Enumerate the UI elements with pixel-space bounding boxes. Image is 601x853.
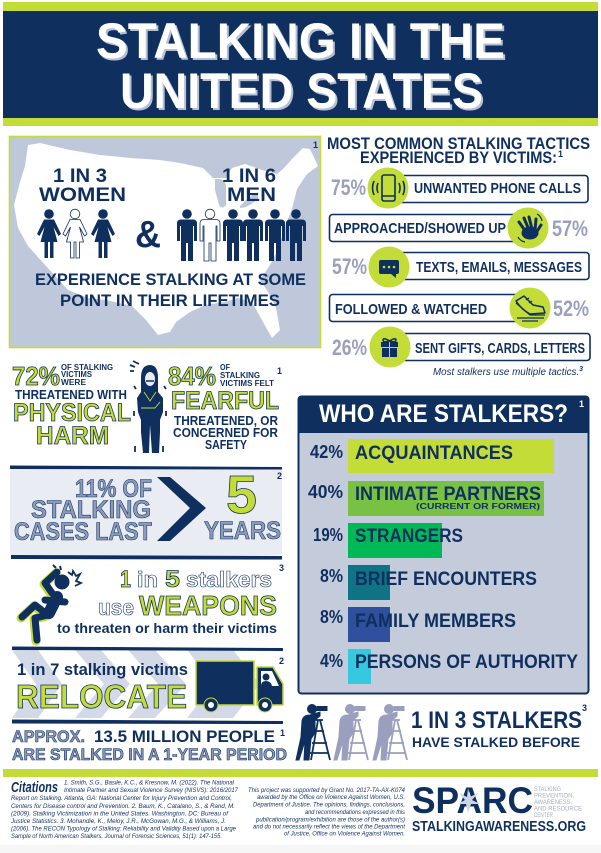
tactic: followed: 52%: [553, 296, 589, 321]
men statistic: MEN: [227, 185, 276, 206]
divider: [11, 555, 282, 560]
statement: [35, 270, 306, 310]
panel: who are stalkers: [298, 396, 589, 694]
weapons text: in: [137, 567, 158, 592]
weapons text: 3: [279, 563, 284, 573]
tactics note: 3: [579, 366, 583, 373]
five years value: YEARS: [204, 517, 281, 545]
percent labels: 42%: [310, 442, 343, 462]
72 percent statistic: PHYSICAL: [13, 399, 131, 427]
repeat stalkers text: 3: [582, 703, 587, 713]
title: STALKING IN THE: [96, 13, 505, 69]
footer bar: [3, 769, 598, 777]
panel: annual count: [12, 727, 287, 764]
relocate text: 1 in 7 stalking victims: [17, 660, 188, 679]
title: [96, 13, 505, 119]
panel: stalking tactics: [327, 135, 590, 378]
tactic: gifts: 26%: [332, 335, 367, 360]
funding statement: [248, 787, 406, 838]
category labels: (CURRENT OR FORMER): [416, 502, 540, 511]
bar chart: [308, 439, 578, 684]
relocate text: 2: [279, 656, 284, 666]
category labels: INTIMATE PARTNERS: [355, 484, 541, 505]
tactic: approached: 57%: [552, 216, 588, 241]
title: UNITED STATES: [120, 63, 483, 119]
84 percent statistic: 1: [277, 366, 282, 376]
panel: five years: [10, 465, 282, 555]
weapons text: WEAPONS: [139, 590, 277, 621]
panel: annual count: 13.5 MILLION PEOPLE: [94, 727, 275, 746]
84 percent statistic: CONCERNED FOR: [173, 425, 279, 440]
funding statement: of Justice, Office on Violence Against Women.: [284, 830, 405, 838]
citations: (2006). The RECON Typology of Stalking: Reliability and Validity Based upon a Large: [11, 826, 236, 832]
panel: annual count: ARE STALKED IN A 1-YEAR PERIOD: [12, 746, 287, 764]
panel: repeat stalkers: [296, 703, 587, 760]
tactic: messages: 57%: [332, 254, 367, 279]
tactic: followed: [330, 288, 589, 328]
weapons text: 1: [120, 566, 131, 593]
logo descriptor: [534, 786, 583, 819]
title banner: UNITED STATES: [122, 65, 485, 121]
logo descriptor: AWARENESS,: [534, 799, 572, 806]
weapons text: stalkers: [186, 567, 272, 592]
category labels: BRIEF ENCOUNTERS: [355, 569, 537, 590]
weapons text: [57, 563, 284, 636]
citations: Centers for Disease control and Prevention. 2. Baum, K., Catalano, S., & Rand, M.: [11, 803, 235, 810]
72 percent statistic: HARM: [36, 422, 109, 450]
relocate text: [16, 656, 284, 715]
84 percent statistic: OF: [220, 363, 230, 372]
panel: annual count: 1: [280, 728, 285, 738]
men statistic: 1 IN 6: [222, 166, 276, 187]
logo descriptor: PREVENTION,: [534, 792, 574, 800]
duration text: STALKING: [31, 496, 151, 524]
tactic: gifts: [332, 326, 590, 368]
84 percent statistic: THREATENED, OR: [174, 413, 279, 428]
percent labels: 8%: [320, 566, 343, 586]
72 percent statistic: THREATENED WITH: [15, 387, 127, 402]
repeat stalkers text: HAVE STALKED BEFORE: [412, 734, 580, 750]
84 percent statistic: FEARFUL: [171, 387, 279, 415]
statement: POINT IN THEIR LIFETIMES: [60, 291, 280, 310]
duration text: CASES LAST: [14, 518, 152, 546]
title banner: [3, 2, 598, 126]
citations: Citations: [11, 779, 58, 796]
weapons text: to threaten or harm their victims: [57, 620, 277, 636]
panel: who are stalkers: 1: [579, 399, 584, 409]
icon: three watchers on ladders: [296, 704, 407, 760]
five years value: [204, 465, 282, 545]
tactic: phone calls: [331, 168, 588, 208]
category labels: [355, 443, 578, 673]
tactic: approached: [330, 208, 588, 248]
men statistic: [222, 166, 276, 206]
percent labels: 40%: [308, 482, 343, 502]
tactic: approached: APPROACHED/SHOWED UP: [334, 220, 506, 237]
category labels: STRANGERS: [355, 526, 463, 547]
tactic: followed: FOLLOWED & WATCHED: [335, 301, 487, 318]
icon: frightened person: [130, 361, 166, 453]
citations: [10, 779, 238, 840]
citations: Justice Statistics. 3. Mohandie, K., Meloy, J.R., McGowan, M.G., & Williams, J.: [10, 818, 226, 825]
tactics heading: EXPERIENCED BY VICTIMS:: [360, 149, 557, 167]
citations: Report on Stalking. Atlanta, GA: National Center for Injury Prevention and Control,: [11, 795, 232, 802]
chevron background: [12, 650, 260, 718]
women statistic: 1 IN 3: [53, 166, 107, 187]
tactic: messages: [332, 246, 589, 288]
icon: logo star: [458, 788, 480, 813]
panel heading: WHO ARE STALKERS?: [319, 400, 568, 428]
funding statement: publication/program/exhibition are those of the author(s): [255, 816, 405, 824]
72 percent statistic: WERE: [61, 378, 87, 387]
logo descriptor: STALKING: [534, 786, 561, 793]
84 percent statistic: 84%: [168, 361, 216, 391]
72 percent statistic: 72%: [12, 361, 60, 391]
map of the United States: [14, 143, 318, 338]
icon: moving truck: [196, 661, 283, 712]
category labels: FAMILY MEMBERS: [355, 611, 516, 632]
logo descriptor: AND RESOURCE: [534, 806, 583, 812]
statement: EXPERIENCE STALKING AT SOME: [35, 270, 306, 289]
panel: weapons: [21, 563, 284, 641]
divider: [12, 720, 283, 724]
citations: Sample of North American Stalkers. Journal of Forensic Sciences, 51(1): 147-155.: [11, 833, 222, 840]
84 percent statistic: STALKING: [220, 371, 260, 380]
panel: threatened and fearful: [12, 361, 282, 453]
percent labels: [308, 442, 343, 671]
category labels: ACQUAINTANCES: [355, 443, 513, 464]
84 percent statistic: SAFETY: [205, 437, 247, 452]
panel: relocate: [12, 646, 284, 718]
percent labels: 8%: [320, 607, 343, 627]
five years value: 5: [226, 465, 257, 525]
citations: 1. Smith, S.G., Basile, K.C., & Kresnow, M. (2022). The National: [64, 780, 234, 786]
footnote 1: 1: [313, 140, 318, 150]
tactics heading: 1: [558, 149, 563, 159]
SPARC logo: [412, 780, 586, 835]
relocate text: RELOCATE: [16, 678, 187, 715]
citations: Intimate Partner and Sexual Violence Survey (NISVS): 2016/2017: [64, 787, 238, 794]
weapons text: use: [98, 595, 134, 620]
women statistic: WOMEN: [39, 185, 126, 206]
duration text: 11% OF: [75, 475, 152, 503]
funding statement: and do not necessarily reflect the views of the Department: [253, 824, 406, 830]
panel: lifetime prevalence map: [10, 136, 320, 348]
percent labels: 4%: [320, 651, 343, 671]
category labels: PERSONS OF AUTHORITY: [355, 652, 578, 673]
citations: (2009). Stalking Victimization in the United States. Washington, DC: Bureau of: [11, 810, 229, 818]
percent labels: 19%: [313, 525, 343, 545]
repeat stalkers text: [411, 703, 587, 750]
72 percent statistic: OF STALKING: [61, 363, 113, 372]
72 percent statistic: [12, 361, 131, 450]
SPARC logo: SPARC: [412, 780, 533, 821]
title banner: STALKING IN THE: [98, 15, 507, 71]
84 percent statistic: VICTIMS FELT: [220, 379, 274, 388]
five years value: 2: [277, 471, 282, 481]
women statistic: [39, 166, 126, 206]
ampersand: &: [135, 214, 161, 256]
icon: three women: [37, 209, 115, 258]
icon: six men: [177, 209, 306, 261]
duration text: [14, 475, 152, 546]
weapons text: 5: [165, 566, 180, 593]
icon: person under threat: [21, 565, 81, 641]
funding statement: awarded by the Office on Violence Against Women, U.S.: [257, 794, 405, 801]
funding statement: This project was supported by Grant No. 2017-TA-AX-K074: [248, 787, 405, 794]
icon: greater-than chevron: [157, 477, 206, 541]
logo descriptor: CENTER: [534, 812, 553, 819]
84 percent statistic: [168, 361, 282, 452]
funding statement: Department of Justice. The opinions, findings, conclusions,: [253, 802, 405, 808]
tactics note: Most stalkers use multiple tactics.: [433, 367, 582, 378]
panel: annual count: APPROX.: [12, 727, 85, 746]
funding statement: and recommendations expressed in this: [305, 809, 406, 816]
tactics heading: [327, 135, 590, 167]
72 percent statistic: VICTIMS: [61, 370, 93, 379]
tactic: phone calls: 75%: [331, 175, 366, 200]
